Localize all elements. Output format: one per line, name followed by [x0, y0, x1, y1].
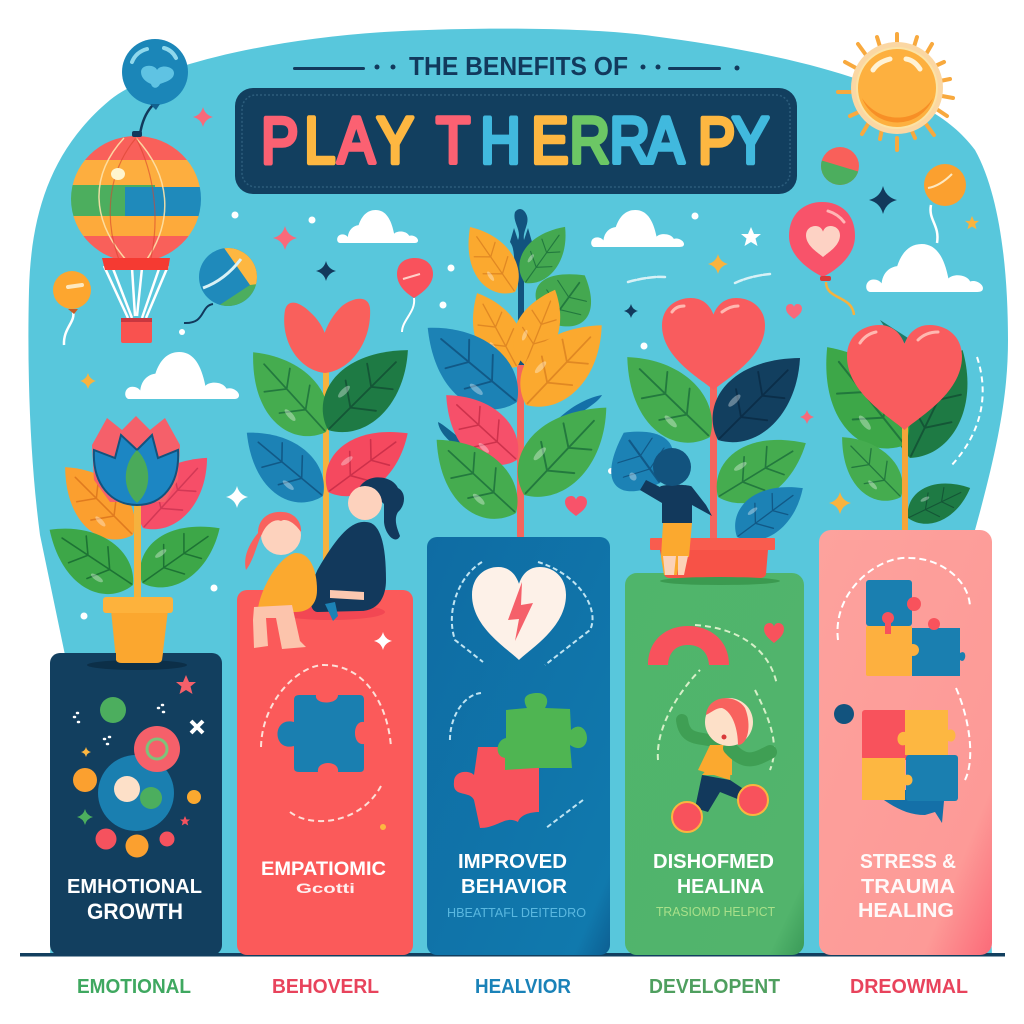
title banner: Y — [377, 104, 414, 177]
bottom labels: BEHOVERL — [272, 976, 379, 998]
label — [858, 851, 956, 922]
icon: orange balloon right — [924, 164, 966, 243]
icon: playing child — [672, 698, 770, 832]
panel: empathic growth — [237, 477, 413, 955]
label: GROWTH — [87, 899, 183, 924]
label: HEALINA — [677, 876, 764, 898]
label: BEHAVIOR — [461, 876, 568, 898]
plant 1: blue flower in pot — [34, 416, 233, 663]
title banner: Y — [732, 104, 769, 177]
plant 5: heart plant — [799, 320, 989, 533]
plant 2: red tulip — [229, 299, 427, 562]
navy dot — [834, 704, 854, 724]
label: HEALING — [858, 900, 954, 922]
label: Gcotti — [296, 880, 355, 896]
icon: green puzzle piece — [498, 693, 587, 770]
baseline — [20, 953, 1005, 956]
icon: child on red tray — [640, 448, 780, 585]
icon: striped beach balloon — [184, 248, 257, 324]
subtitle: the benefits of: THE BENEFITS OF — [409, 51, 628, 81]
panel: stress and trauma healing — [819, 530, 992, 955]
icon: blue balloon — [122, 39, 188, 134]
label — [653, 851, 775, 919]
decorative sparkles — [80, 107, 983, 620]
icon: orange balloon — [53, 271, 91, 345]
label: TRAUMA — [861, 876, 955, 898]
panel: improved behavior — [427, 537, 610, 955]
bottom labels: HEALVIOR — [475, 976, 572, 998]
icon: blue puzzle piece — [278, 695, 364, 772]
title banner: R — [570, 104, 610, 177]
label — [67, 876, 202, 924]
bottom labels: DEVELOPENT — [649, 976, 780, 998]
title banner: P — [698, 104, 735, 177]
icon: sun — [838, 34, 953, 150]
icon: heart balloon — [789, 202, 855, 315]
icon: white heart with bolt — [472, 567, 566, 660]
plant 4: heart plant in red tray — [593, 298, 820, 553]
label: DISHOFMED — [653, 851, 774, 873]
label: TRASIOMD HELPICT — [656, 904, 775, 919]
icon: puzzle group two — [862, 710, 958, 823]
icon: red arch — [648, 626, 729, 665]
panel: emotional growth — [50, 653, 222, 955]
icon: red and green ball — [820, 146, 860, 186]
title banner: P — [261, 104, 298, 177]
flower head — [92, 416, 180, 505]
tulip bloom — [284, 299, 370, 373]
title banner: T — [436, 104, 470, 177]
pot base overlap — [116, 653, 163, 663]
icon: red puzzle piece — [454, 747, 539, 828]
pot — [103, 597, 173, 663]
label: EMHOTIONAL — [67, 876, 202, 898]
bottom labels — [77, 976, 968, 998]
label: IMPROVED — [458, 851, 567, 873]
emotional toys icon — [73, 675, 203, 858]
clouds — [125, 210, 983, 399]
title banner: R — [609, 104, 650, 177]
label: STRESS & — [860, 851, 956, 873]
panel: dishofmed healina — [625, 448, 804, 955]
icon: puzzle group one — [866, 580, 965, 676]
label — [447, 851, 586, 920]
title banner: E — [531, 104, 569, 177]
label: EMPATIOMIC — [261, 859, 386, 880]
icon: small red balloon — [397, 258, 433, 332]
label — [261, 859, 386, 896]
title banner: L — [304, 104, 336, 177]
icon: hot air balloon — [70, 130, 205, 343]
label: HBEATTAFL DEITEDRO — [447, 905, 586, 920]
bottom labels: EMOTIONAL — [77, 976, 191, 998]
plant 3: tall leafy stem — [407, 209, 627, 538]
title banner: A — [337, 104, 375, 177]
subtitle: the benefits of — [293, 51, 740, 81]
title banner: H — [480, 104, 521, 177]
bottom labels: DREOWMAL — [850, 976, 968, 998]
title banner — [235, 88, 797, 194]
title banner: A — [647, 104, 684, 177]
figures: woman and girl sitting — [245, 477, 404, 649]
